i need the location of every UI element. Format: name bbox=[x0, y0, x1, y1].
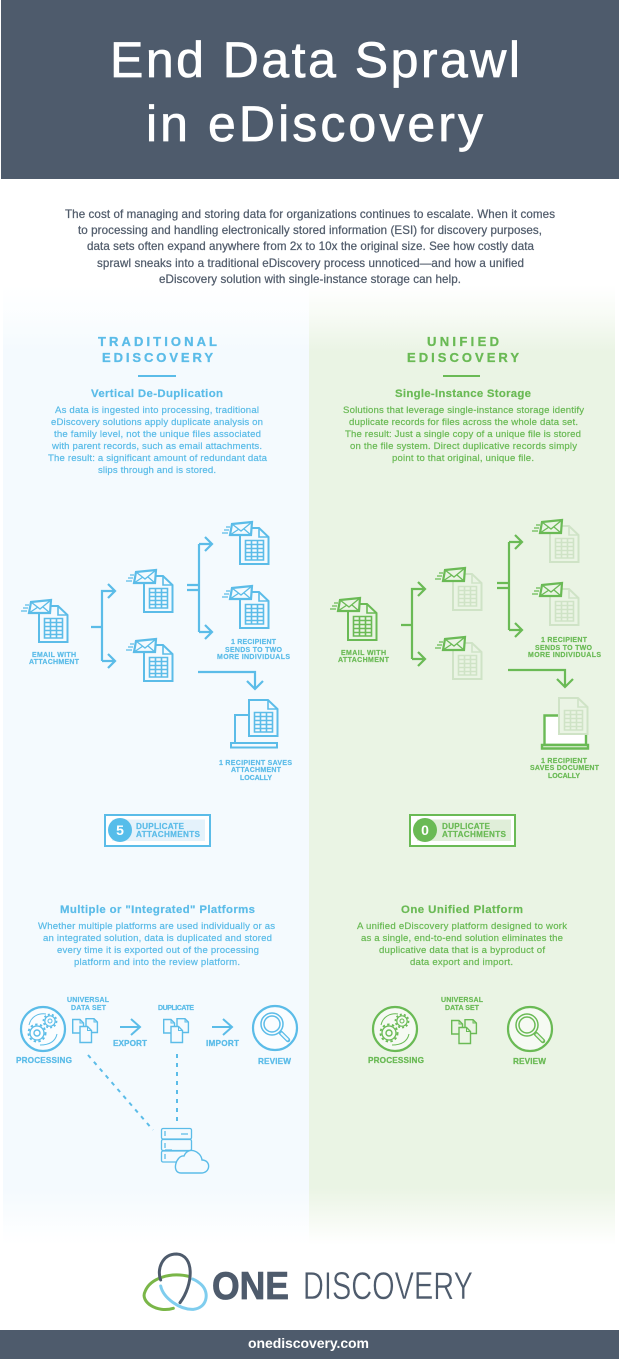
text block: one unified platform: A unified eDiscovery platform designed to work bbox=[357, 921, 567, 932]
label: sends to two more bbox=[217, 639, 290, 661]
heading: unified eDiscovery: EDISCOVERY bbox=[407, 350, 519, 365]
panel: traditional column bbox=[16, 334, 297, 1173]
title banner bbox=[1, 0, 619, 179]
icon: email with attachment bbox=[21, 600, 68, 642]
intro paragraph: to processing and handling electronically stored information (ESI) for discovery purposes, bbox=[78, 224, 542, 237]
icon: email with attachment bbox=[330, 598, 376, 640]
text block: single-instance storage: The result: Just a single copy of a unique file is stored bbox=[345, 429, 581, 440]
panel: unified column bbox=[330, 334, 601, 1066]
text block: multiple platforms: every time it is exported out of the processing bbox=[57, 945, 259, 956]
label: sends to two more: 1 RECIPIENT bbox=[231, 639, 277, 646]
icon: forwarded pointer two bbox=[532, 583, 578, 625]
intro paragraph: data sets often expand anywhere from 2x to 10x the original size. See how costly data bbox=[87, 240, 535, 253]
text block: single-instance storage: duplicate records for files across the whole data set. bbox=[349, 417, 578, 428]
intro paragraph: The cost of managing and storing data for organizations continues to escalate. When it comes bbox=[65, 208, 555, 221]
text block: multiple platforms: platform and into the review platform. bbox=[74, 957, 240, 968]
icon: universal data set bbox=[452, 1020, 476, 1044]
text block: multiple platforms: an integrated solution, data is duplicated and stored bbox=[43, 933, 272, 944]
heading: unified eDiscovery bbox=[407, 334, 519, 377]
label: universal data set bbox=[67, 997, 110, 1012]
icon: duplicate data set bbox=[164, 1019, 188, 1042]
label: sends to two more: 1 RECIPIENT bbox=[541, 637, 588, 644]
text block: one unified platform: data export and import. bbox=[410, 957, 513, 968]
panel: traditional eDiscovery background bbox=[3, 285, 309, 1245]
icon: server and cloud storage bbox=[162, 1128, 209, 1173]
text block: vertical de-duplication: The result: a significant amount of redundant data bbox=[48, 453, 268, 464]
label: sends to two more bbox=[528, 637, 601, 659]
text block: vertical de-duplication: Vertical De-Duplication bbox=[91, 388, 223, 400]
label: sends to two more: SENDS TO TWO bbox=[535, 645, 593, 652]
icon: first recipient copy bbox=[126, 570, 172, 612]
heading: traditional eDiscovery bbox=[98, 334, 217, 377]
diagram: multiple platforms flow bbox=[16, 997, 297, 1173]
icon: forwarded copy two bbox=[222, 586, 268, 628]
label: saves document locally: LOCALLY bbox=[548, 773, 580, 780]
label: universal data set: UNIVERSAL bbox=[67, 997, 110, 1004]
text block: single-instance storage: point to that original, unique file. bbox=[392, 453, 534, 464]
label: email with attachment: EMAIL WITH bbox=[341, 650, 386, 657]
icon: second recipient pointer bbox=[435, 637, 482, 679]
callout: 5 duplicate attachments: DUPLICATE bbox=[136, 822, 185, 831]
intro paragraph bbox=[65, 208, 555, 286]
icon: forwarded pointer one bbox=[532, 520, 578, 562]
logo: One Discovery bbox=[144, 1254, 473, 1310]
icon: forwarded copy one bbox=[222, 522, 268, 564]
text block: single-instance storage: Solutions that leverage single-instance storage identify bbox=[343, 405, 584, 416]
label: review: REVIEW bbox=[513, 1057, 546, 1066]
text block: vertical de-duplication: the family level, not the unique files associated bbox=[54, 429, 261, 440]
text block: vertical de-duplication: As data is ingested into processing, traditional bbox=[55, 405, 259, 416]
label: import: IMPORT bbox=[206, 1039, 239, 1048]
title banner: End Data Sprawl bbox=[110, 32, 520, 88]
intro paragraph: sprawl sneaks into a traditional eDiscovery process unnoticed—and how a unified bbox=[97, 257, 524, 270]
heading: traditional eDiscovery: EDISCOVERY bbox=[102, 350, 213, 365]
text block: vertical de-duplication: with parent records, such as email attachments. bbox=[51, 441, 262, 452]
label: universal data set: DATA SET bbox=[445, 1005, 480, 1012]
icon: processing bbox=[21, 1007, 65, 1051]
icon: interlocking rings bbox=[144, 1254, 206, 1310]
text block: multiple platforms: Whether multiple platforms are used individually or as bbox=[38, 921, 275, 932]
icon: universal data set bbox=[73, 1019, 97, 1042]
label: saves attachment locally: LOCALLY bbox=[240, 775, 272, 782]
label: saves document locally: SAVES DOCUMENT bbox=[530, 765, 600, 772]
callout: 5 duplicate attachments bbox=[105, 815, 210, 846]
text block: single-instance storage bbox=[343, 388, 584, 464]
text block: one unified platform: One Unified Platform bbox=[401, 904, 523, 916]
label: saves document locally bbox=[530, 758, 600, 780]
intro paragraph: eDiscovery solution with single-instance storage can help. bbox=[159, 273, 461, 286]
icon: first recipient pointer bbox=[435, 568, 482, 610]
label: email with attachment bbox=[29, 652, 80, 666]
icon: review bbox=[253, 1006, 297, 1050]
text block: vertical de-duplication: slips through and is stored. bbox=[98, 465, 216, 476]
label: sends to two more: MORE INDIVIDUALS bbox=[217, 654, 290, 661]
label: processing: PROCESSING bbox=[16, 1056, 72, 1065]
footer bar bbox=[0, 1330, 619, 1359]
callout: 0 duplicate attachments: 0 bbox=[421, 822, 429, 838]
label: email with attachment: ATTACHMENT bbox=[338, 657, 390, 664]
callout: 0 duplicate attachments bbox=[410, 815, 515, 846]
label: universal data set bbox=[441, 997, 484, 1012]
label: email with attachment: EMAIL WITH bbox=[32, 652, 76, 659]
label: saves document locally: 1 RECIPIENT bbox=[541, 758, 588, 765]
arrow: export bbox=[120, 1019, 140, 1035]
icon: review bbox=[508, 1007, 552, 1051]
callout: 5 duplicate attachments: 5 bbox=[116, 822, 124, 838]
arrows bbox=[401, 535, 573, 687]
icon: processing bbox=[373, 1007, 417, 1051]
callout: 5 duplicate attachments: ATTACHMENTS bbox=[136, 830, 201, 839]
text block: vertical de-duplication bbox=[48, 388, 268, 476]
icon: laptop with pointer bbox=[542, 698, 588, 748]
arrows bbox=[91, 537, 263, 689]
label: export: EXPORT bbox=[113, 1039, 147, 1048]
logo: One Discovery: DISCOVERY bbox=[303, 1265, 473, 1308]
text block: single-instance storage: Single-Instance Storage bbox=[395, 388, 531, 400]
diagram: vertical de-duplication flow bbox=[21, 522, 292, 782]
title banner: in eDiscovery bbox=[146, 96, 483, 152]
callout: 0 duplicate attachments: DUPLICATE bbox=[442, 822, 491, 831]
label: sends to two more: MORE INDIVIDUALS bbox=[528, 652, 601, 659]
diagram: single-instance flow bbox=[330, 520, 601, 780]
label: saves attachment locally: ATTACHMENT bbox=[231, 767, 282, 774]
footer bar: onediscovery.com bbox=[248, 1335, 369, 1351]
text block: one unified platform: duplicative data that is a byproduct of bbox=[379, 945, 545, 956]
callout: 0 duplicate attachments: ATTACHMENTS bbox=[442, 830, 507, 839]
label: saves attachment locally bbox=[219, 760, 292, 782]
panel: unified eDiscovery background bbox=[309, 285, 615, 1245]
logo: One Discovery: ONE bbox=[212, 1265, 289, 1308]
label: review: REVIEW bbox=[258, 1057, 291, 1066]
dashed connectors bbox=[88, 1054, 177, 1130]
icon: laptop with local attachment bbox=[231, 700, 278, 748]
heading: traditional eDiscovery: TRADITIONAL bbox=[98, 334, 217, 349]
diagram: unified platform flow bbox=[368, 997, 552, 1066]
label: sends to two more: SENDS TO TWO bbox=[225, 647, 283, 654]
label: email with attachment bbox=[338, 650, 390, 664]
text block: multiple platforms bbox=[38, 904, 275, 968]
label: email with attachment: ATTACHMENT bbox=[29, 659, 80, 666]
label: universal data set: UNIVERSAL bbox=[441, 997, 484, 1004]
label: processing: PROCESSING bbox=[368, 1056, 424, 1065]
label: duplicate: DUPLICATE bbox=[158, 1005, 194, 1012]
label: saves attachment locally: 1 RECIPIENT SAVES bbox=[219, 760, 292, 767]
heading: unified eDiscovery: UNIFIED bbox=[427, 334, 499, 349]
label: universal data set: DATA SET bbox=[71, 1005, 107, 1012]
text block: one unified platform: as a single, end-to-end solution eliminates the bbox=[361, 933, 563, 944]
text block: multiple platforms: Multiple or "Integrated" Platforms bbox=[60, 904, 255, 916]
text block: single-instance storage: on the file system. Direct duplicative records simply bbox=[350, 441, 577, 452]
text block: vertical de-duplication: eDiscovery solutions apply duplicate analysis on bbox=[51, 417, 263, 428]
text block: one unified platform bbox=[357, 904, 567, 968]
arrow: import bbox=[212, 1019, 232, 1035]
icon: second recipient copy bbox=[126, 639, 172, 681]
